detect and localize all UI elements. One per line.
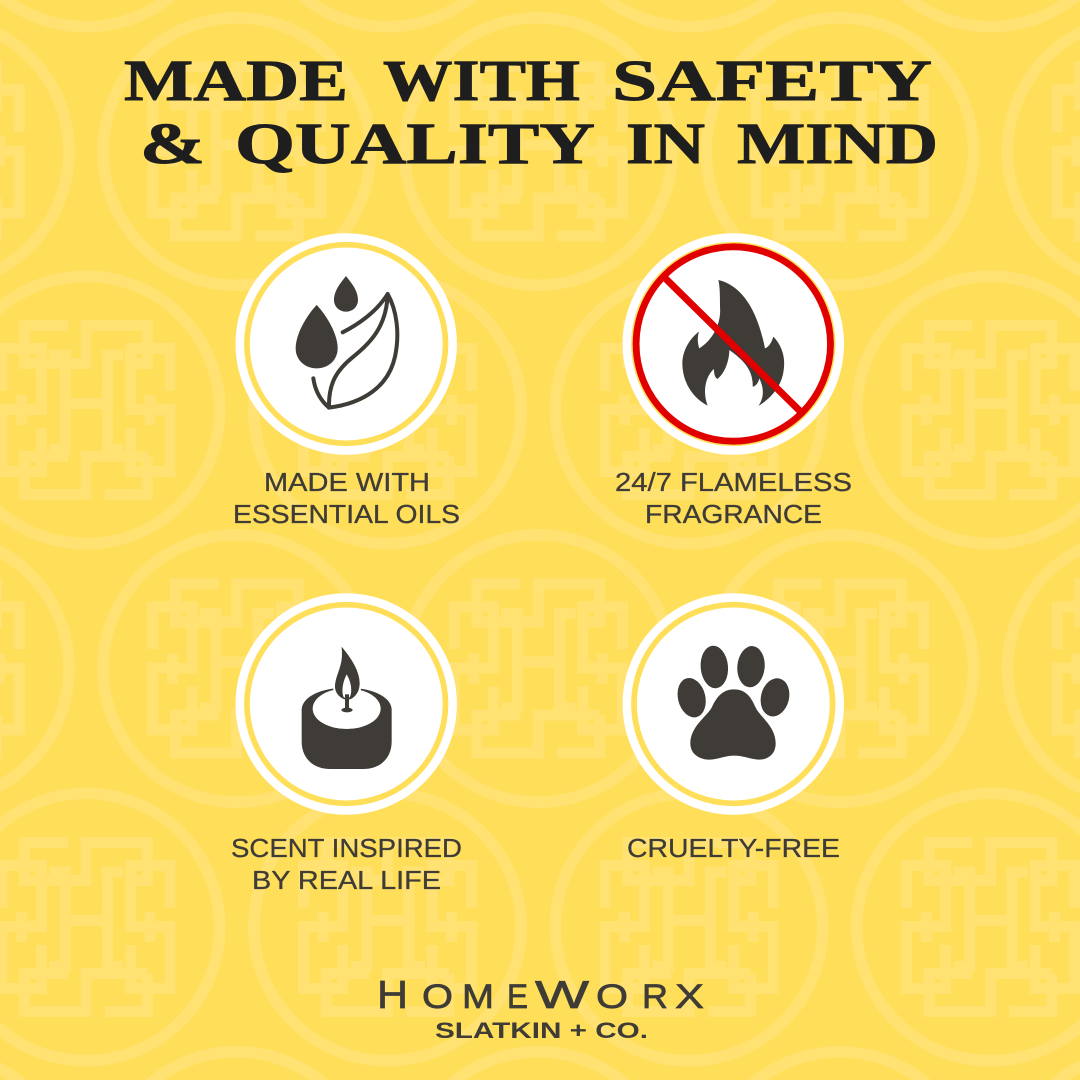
logo: HomeWorx Slatkin + Co.: H: [377, 974, 408, 1017]
label: made with essential oils: MADE WITH: [264, 467, 430, 497]
title: &: [140, 111, 205, 176]
badge: scent: [236, 593, 457, 815]
label: 24/7 flameless fragrance: [615, 467, 852, 529]
label: cruelty-free: CRUELTY-FREE: [627, 833, 840, 863]
icon: candle: [302, 643, 392, 769]
title: MADE: [124, 48, 348, 113]
label: made with essential oils: [233, 467, 460, 529]
panel: scent: [231, 593, 462, 895]
title: [124, 48, 938, 176]
label: made with essential oils: ESSENTIAL OILS: [233, 499, 460, 529]
panel: flameless: [615, 233, 852, 529]
badge: essential oils: [236, 233, 457, 455]
title: QUALITY: [235, 111, 595, 176]
title: MIND: [737, 111, 938, 176]
badge: cruelty-free: [623, 593, 844, 815]
label: scent inspired by real life: BY REAL LIFE: [252, 865, 441, 895]
logo: HomeWorx Slatkin + Co.: O: [596, 978, 628, 1016]
icon: paw: [674, 645, 793, 760]
icon: prohibition sign: [636, 247, 830, 441]
logo: HomeWorx Slatkin + Co.: R: [642, 978, 668, 1016]
logo: HomeWorx Slatkin + Co.: E: [507, 978, 528, 1016]
icon: drops and leaf: [296, 276, 397, 408]
title: WITH: [383, 48, 580, 113]
logo: HomeWorx Slatkin + Co.: X: [675, 978, 704, 1016]
panel: cruelty-free: [623, 593, 844, 863]
title: SAFETY: [612, 48, 932, 113]
label: scent inspired by real life: [231, 833, 462, 895]
title: IN: [626, 111, 705, 176]
logo: HomeWorx Slatkin + Co.: W: [535, 974, 589, 1017]
logo: HomeWorx Slatkin + Co.: [377, 974, 704, 1043]
panel: essential oils: [233, 233, 460, 529]
logo: HomeWorx Slatkin + Co.: O: [422, 978, 453, 1016]
icon: flame: [682, 280, 784, 406]
logo: HomeWorx Slatkin + Co.: SLATKIN + CO.: [435, 1018, 648, 1043]
label: 24/7 flameless fragrance: FRAGRANCE: [645, 499, 822, 529]
label: scent inspired by real life: SCENT INSPIRED: [231, 833, 462, 863]
badge: flameless: [623, 233, 844, 455]
logo: HomeWorx Slatkin + Co.: M: [462, 978, 494, 1016]
label: 24/7 flameless fragrance: 24/7 FLAMELESS: [615, 467, 852, 497]
